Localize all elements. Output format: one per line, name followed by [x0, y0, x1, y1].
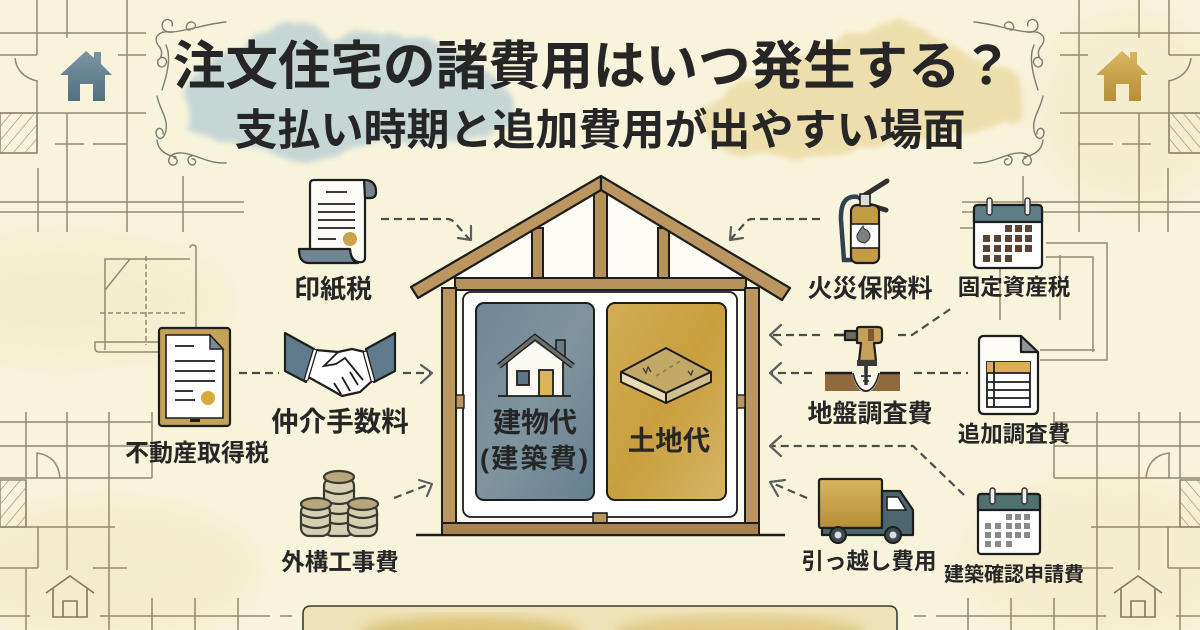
label: moving cost: 引っ越し費用 [801, 549, 937, 574]
label: land cost: 土地代 [628, 425, 710, 456]
queen posts [532, 228, 543, 278]
label: fire insurance: 火災保険料 [807, 275, 933, 303]
left joint [456, 395, 464, 408]
tie beam [455, 278, 746, 290]
icon: stamp tax scroll [299, 180, 376, 263]
arrow: tablet to handshake [239, 372, 279, 374]
label: ground survey: 地盤調査費 [807, 400, 933, 428]
label: building cost: 建物代 [493, 407, 577, 438]
bottom panel [303, 606, 897, 630]
label: construction cost: (建築費) [480, 444, 588, 474]
left post [442, 288, 456, 524]
icon: outline house bottom right [1114, 576, 1162, 617]
icon: coins [301, 471, 378, 536]
icon: gold house top right [1096, 51, 1148, 101]
arrow: coins to house [394, 480, 432, 498]
subtitle: 支払い時期と追加費用が出やすい場面 [234, 107, 966, 155]
left rafter [411, 176, 601, 298]
icon: outline house bottom left [46, 576, 94, 617]
right post [745, 288, 759, 524]
arrow: handshake to house [403, 365, 432, 383]
gable white panes [455, 186, 745, 278]
label: real estate acquisition tax: 不動産取得税 [125, 440, 269, 467]
centre stub [593, 513, 607, 523]
ground line [416, 534, 785, 536]
right rafter [601, 176, 790, 300]
interior white [456, 290, 745, 523]
arrow: property tax to drill [898, 308, 952, 335]
label: additional survey: 追加調査費 [958, 422, 1070, 447]
label: exterior works: 外構工事費 [281, 549, 399, 575]
watercolor wash: gold [700, 20, 1024, 160]
icon: real estate tablet [159, 328, 230, 426]
icon: fire extinguisher [841, 181, 887, 263]
icon: moving truck [819, 479, 913, 543]
icon: calendar property tax [974, 198, 1042, 268]
icon: calendar building confirmation [978, 488, 1040, 554]
icon: house in panel [498, 337, 573, 396]
arrow: moving to house [770, 480, 807, 498]
king post [594, 190, 607, 278]
title: 注文住宅の諸費用はいつ発生する？ [173, 37, 1013, 96]
watercolor wash: blue [183, 21, 515, 163]
arrow: fire insurance to house [730, 219, 820, 240]
sill [442, 523, 759, 535]
arrow: additional survey to ground [914, 372, 968, 374]
right joint [737, 395, 745, 408]
arrow: ground to house [770, 363, 812, 383]
house frame [411, 176, 790, 535]
panel: building cost [476, 303, 594, 500]
label: property tax: 固定資産税 [958, 275, 1071, 300]
panel: land cost [607, 303, 726, 500]
arrow: building confirmation to house [770, 436, 964, 495]
label: stamp tax: 印紙税 [294, 274, 372, 304]
label: brokerage fee: 仲介手数料 [271, 406, 409, 437]
icon: ground boring [825, 366, 900, 392]
icon: land slab [621, 348, 711, 403]
arrow: stamp tax to house [381, 219, 471, 240]
arrow: drill to house [770, 325, 820, 345]
label: building confirmation application: 建築確認申請費 [944, 563, 1084, 586]
icon: additional survey sheet [979, 336, 1038, 414]
ornamental corner flourishes [156, 19, 1044, 165]
icon: handshake [285, 333, 395, 396]
icon: drill [834, 327, 882, 384]
icon: blue house top left [60, 51, 112, 101]
